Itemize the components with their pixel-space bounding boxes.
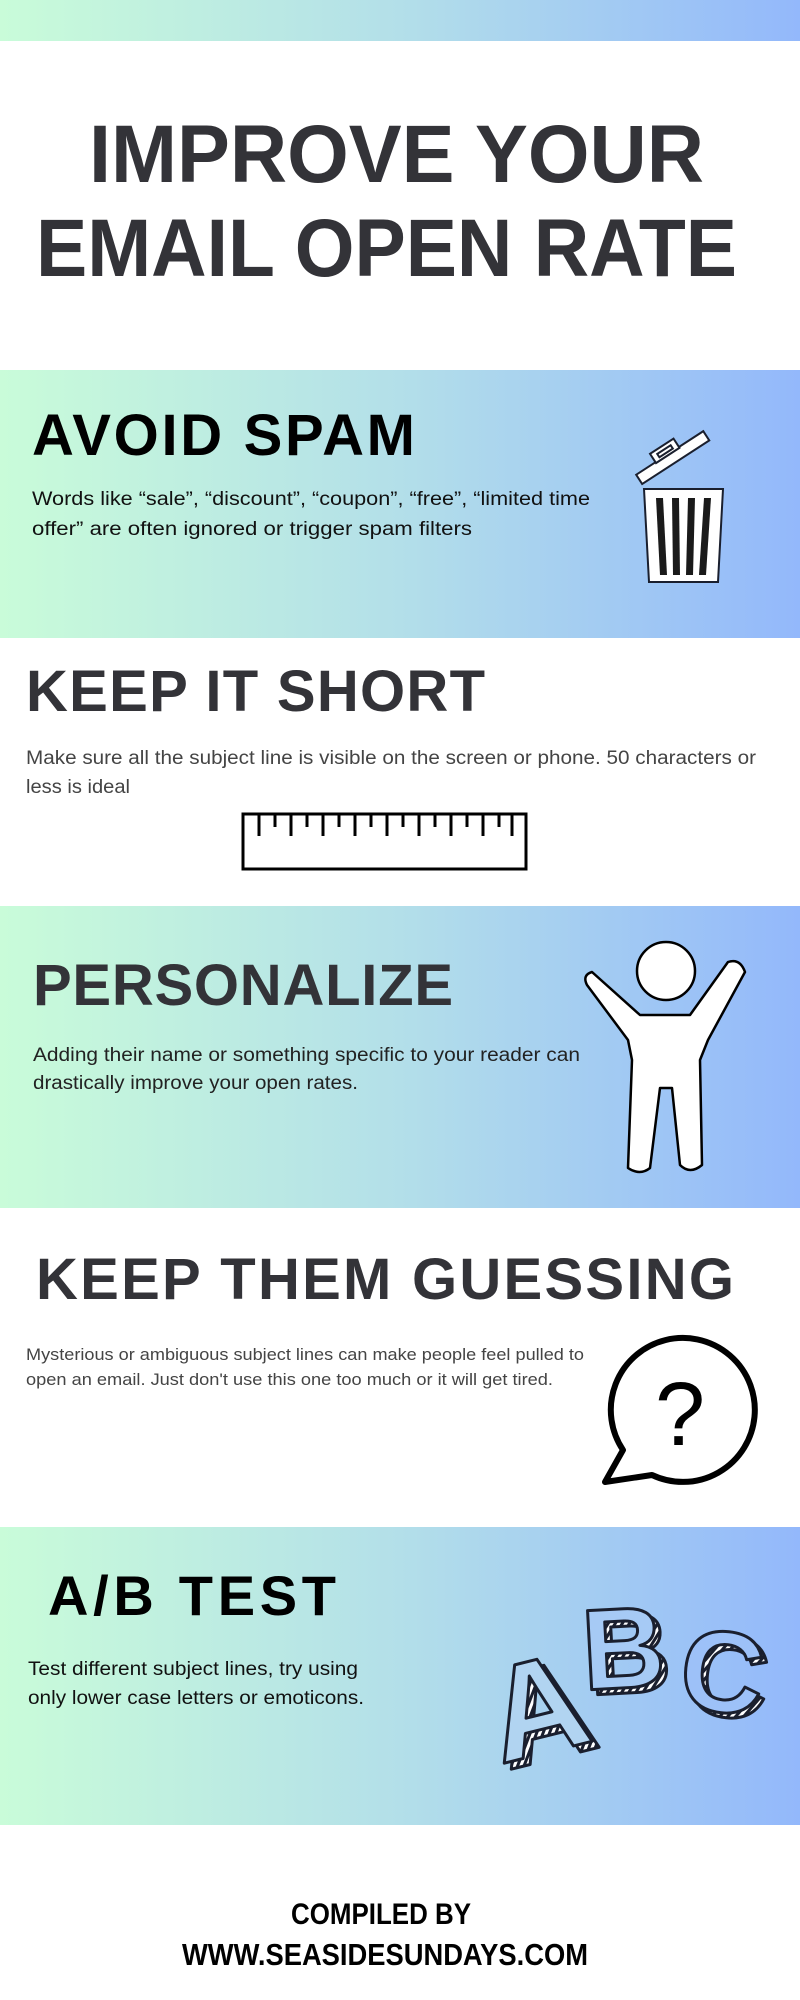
panel: personalize <box>0 906 800 1208</box>
text: a/b test: Test different subject lines, try using <box>28 1659 358 1680</box>
panel: keep them guessing <box>26 1247 755 1482</box>
heading: a/b test: A/B TEST <box>48 1564 336 1627</box>
panel: a/b test <box>0 1527 800 1825</box>
icon: speech bubble question <box>605 1338 755 1482</box>
icon: speech bubble question: ? <box>655 1365 705 1465</box>
heading: personalize: PERSONALIZE <box>33 953 453 1018</box>
icon: ABC letters: A <box>471 1622 603 1792</box>
text: avoid spam <box>32 489 590 540</box>
icon: ABC letters: B <box>579 1583 668 1715</box>
footer <box>182 1898 588 1972</box>
icon: trash can <box>631 423 723 582</box>
icon: ABC letters <box>471 1583 775 1798</box>
heading: keep them guessing: KEEP THEM GUESSING <box>36 1247 734 1312</box>
text: keep them guessing: open an email. Just don't use this one too much or it will get tired. <box>26 1370 553 1389</box>
text: avoid spam: offer” are often ignored or trigger spam filters <box>32 519 472 540</box>
text: avoid spam: Words like “sale”, “discount”, “coupon”, “free”, “limited time <box>32 489 590 510</box>
text: a/b test <box>28 1659 364 1709</box>
heading: avoid spam: AVOID SPAM <box>32 403 415 468</box>
panel: avoid spam <box>0 370 800 638</box>
text: keep them guessing: Mysterious or ambiguous subject lines can make people feel pulled to <box>26 1345 584 1364</box>
text: personalize: Adding their name or something specific to your reader can <box>33 1045 580 1066</box>
footer: COMPILED BY <box>291 1898 471 1931</box>
top gradient bar <box>0 0 800 41</box>
icon: ABC letters: B <box>585 1588 674 1720</box>
heading: keep it short: KEEP IT SHORT <box>26 659 485 724</box>
icon: ABC letters: C <box>674 1605 770 1741</box>
text: keep it short: Make sure all the subject line is visible on the screen or phone. 50 characters or <box>26 748 757 769</box>
footer: WWW.SEASIDESUNDAYS.COM <box>182 1937 588 1972</box>
text: personalize: drastically improve your open rates. <box>33 1073 358 1094</box>
title: EMAIL OPEN RATE <box>36 203 737 294</box>
text: a/b test: only lower case letters or emoticons. <box>28 1688 364 1709</box>
icon: ABC letters: C <box>679 1610 775 1746</box>
text: personalize <box>33 1045 580 1094</box>
icon: person <box>585 942 745 1172</box>
text: keep it short <box>26 748 757 798</box>
text: keep them guessing <box>26 1345 584 1389</box>
icon: ABC letters: A <box>478 1628 610 1798</box>
icon: ruler <box>243 814 526 869</box>
text: keep it short: less is ideal <box>26 777 130 798</box>
title <box>36 109 737 294</box>
title: IMPROVE YOUR <box>89 109 704 200</box>
panel: keep it short <box>26 659 757 869</box>
